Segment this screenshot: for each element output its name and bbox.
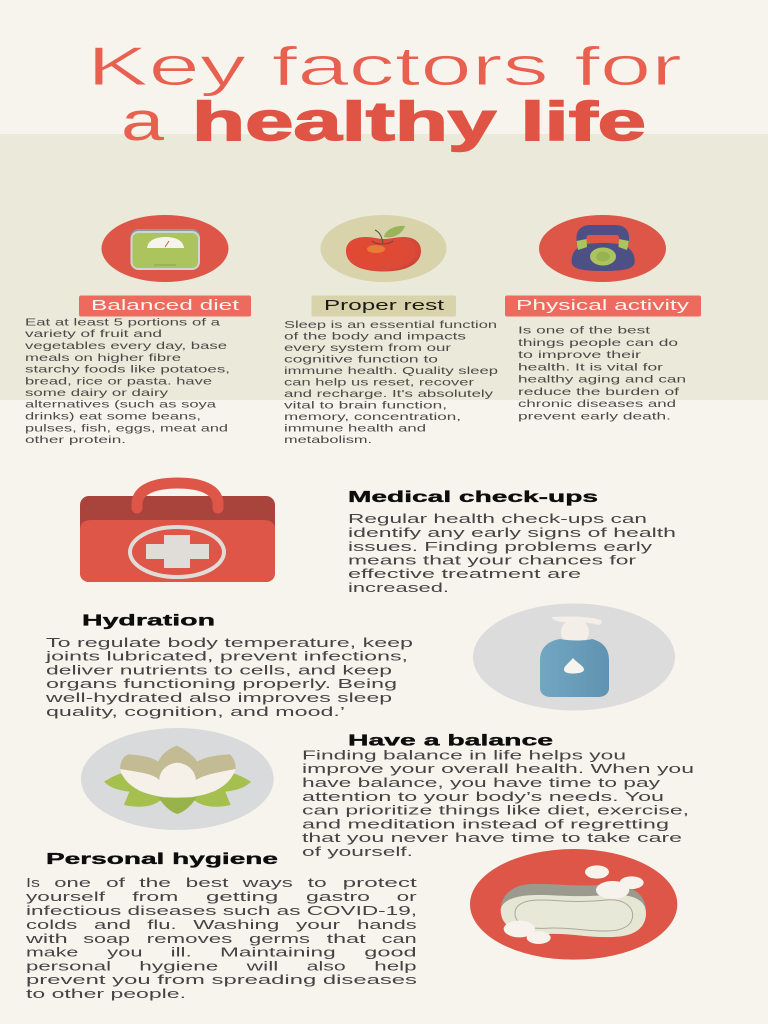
text: personal hygiene: from: [132, 889, 178, 904]
heading: have a balance: Have a balance: [348, 732, 554, 750]
panel: balanced diet: [25, 215, 251, 446]
icon: weighing scale: [102, 215, 228, 282]
text: balanced diet: other protein.: [25, 435, 126, 446]
text: personal hygiene: that: [327, 931, 366, 946]
text: proper rest: memory, concentration,: [284, 412, 461, 423]
text: personal hygiene: hands: [357, 917, 417, 932]
text: personal hygiene: to other people.: [26, 986, 186, 1001]
text: proper rest: immune health. Quality sleep: [284, 366, 498, 377]
text: personal hygiene: yourself: [26, 889, 106, 904]
text: personal hygiene: infectious diseases such as COVID-19,: [26, 903, 417, 918]
heading: personal hygiene: Personal hygiene: [46, 851, 279, 868]
text: have a balance: that you never have time to take care: [302, 830, 682, 845]
text: personal hygiene: prevent you from spreading diseases: [26, 972, 418, 987]
text: personal hygiene: gastro: [306, 889, 370, 904]
section: have a balance: [302, 732, 694, 859]
text: personal hygiene: the: [139, 875, 171, 890]
label: proper rest: [312, 296, 456, 316]
text: hydration: quality, cognition, and mood.’: [46, 704, 345, 719]
text: have a balance: have balance, you have time to pay: [302, 775, 661, 790]
text: have a balance: can prioritize things like diet, exercise,: [302, 802, 689, 818]
text: have a balance: of yourself.: [302, 844, 413, 859]
text: physical activity: prevent early death.: [518, 412, 671, 422]
text: hydration: To regulate body temperature, keep: [46, 635, 413, 650]
text: hydration: [44, 635, 413, 719]
text: personal hygiene: also: [307, 958, 346, 974]
label: balanced diet: Balanced diet: [91, 298, 239, 314]
panel: proper rest: [284, 215, 498, 446]
text: have a balance: improve your overall health. When you: [302, 761, 694, 776]
text: proper rest: Sleep is an essential function: [284, 320, 497, 331]
text: personal hygiene: removes: [147, 931, 233, 946]
icon: kettlebell: [539, 215, 666, 282]
text: balanced diet: drinks) eat some beans,: [25, 412, 201, 422]
text: personal hygiene: personal: [26, 958, 111, 974]
heading: medical check-ups: Medical check-ups: [348, 489, 598, 506]
text: balanced diet: variety of fruit and: [25, 329, 162, 340]
text: proper rest: of the body and impacts: [284, 332, 466, 342]
text: personal hygiene: Is: [26, 875, 41, 890]
text: personal hygiene: or: [397, 889, 418, 904]
text: have a balance: [302, 748, 694, 859]
text: personal hygiene: will: [245, 958, 279, 974]
icon: lotus flower: [81, 728, 274, 830]
text: balanced diet: vegetables every day, base: [25, 341, 227, 352]
text: personal hygiene: Washing: [193, 917, 279, 932]
text: medical check-ups: means that your chances for: [348, 552, 637, 568]
title: Key factors for: [87, 35, 682, 97]
text: medical check-ups: Regular health check-ups can: [348, 511, 647, 526]
text: personal hygiene: of: [106, 875, 126, 890]
text: medical check-ups: effective treatment are: [348, 566, 581, 581]
text: physical activity: health. It is vital for: [518, 362, 664, 374]
text: balanced diet: alternatives (such as soya: [25, 400, 216, 411]
text: have a balance: Finding balance in life helps you: [302, 748, 626, 762]
text: balanced diet: starchy foods like potatoes,: [25, 364, 230, 376]
text: personal hygiene: getting: [206, 889, 278, 904]
text: personal hygiene: with: [24, 931, 68, 946]
title: a: [121, 90, 165, 152]
icon: apple: [320, 215, 446, 282]
text: hydration: well-hydrated also improves sleep: [44, 690, 392, 705]
text: proper rest: every system from our: [284, 343, 452, 354]
label: balanced diet: [79, 296, 251, 316]
text: personal hygiene: ways: [241, 875, 294, 890]
text: personal hygiene: you: [107, 944, 143, 960]
text: balanced diet: Eat at least 5 portions of a: [25, 318, 220, 328]
title: healthy life: [192, 90, 646, 152]
icon: first aid kit: [80, 483, 275, 582]
text: proper rest: cognitive function to: [284, 354, 438, 366]
text: balanced diet: bread, rice or pasta. have: [25, 376, 212, 387]
text: personal hygiene: hygiene: [139, 958, 218, 974]
text: personal hygiene: colds: [26, 917, 78, 932]
text: proper rest: immune health and: [284, 424, 426, 434]
text: personal hygiene: germs: [249, 931, 311, 946]
text: personal hygiene: help: [374, 958, 417, 974]
text: physical activity: Is one of the best: [518, 326, 650, 336]
label: proper rest: Proper rest: [324, 298, 444, 314]
text: have a balance: attention to your body’s needs. You: [302, 789, 664, 804]
title: [87, 35, 682, 152]
text: personal hygiene: protect: [343, 875, 417, 890]
section: hydration: [44, 612, 413, 719]
text: hydration: organs functioning properly. Being: [46, 676, 397, 691]
text: personal hygiene: flu.: [147, 917, 177, 932]
text: hydration: deliver nutrients to cells, and keep: [46, 662, 392, 678]
text: physical activity: healthy aging and can: [518, 374, 686, 386]
heading: hydration: Hydration: [82, 612, 215, 630]
text: medical check-ups: issues. Finding problems early: [348, 539, 653, 554]
text: personal hygiene: your: [296, 917, 341, 932]
label: physical activity: [505, 296, 701, 316]
text: proper rest: metabolism.: [284, 435, 372, 446]
text: physical activity: to improve their: [518, 350, 642, 361]
text: medical check-ups: [348, 511, 676, 595]
text: proper rest: can help us reset, recover: [284, 378, 475, 388]
text: hydration: joints lubricated, prevent infections,: [44, 648, 408, 664]
label: physical activity: Physical activity: [516, 298, 690, 314]
text: balanced diet: meals on higher fibre: [25, 353, 181, 364]
text: physical activity: [518, 326, 686, 422]
text: balanced diet: [25, 318, 230, 446]
section: medical check-ups: [348, 489, 676, 595]
text: personal hygiene: make: [26, 944, 78, 960]
text: proper rest: and recharge. It's absolutely: [284, 389, 494, 400]
text: personal hygiene: Maintaining: [220, 944, 336, 960]
text: have a balance: and meditation instead of regretting: [302, 816, 669, 832]
text: physical activity: things people can do: [518, 338, 678, 349]
text: personal hygiene: one: [54, 875, 91, 890]
text: personal hygiene: to: [308, 875, 327, 890]
icon: soap bar: [470, 849, 677, 960]
text: physical activity: reduce the burden of: [518, 387, 679, 398]
text: proper rest: vital to brain function,: [284, 400, 447, 412]
text: proper rest: [284, 320, 498, 446]
text: personal hygiene: good: [364, 944, 417, 960]
text: balanced diet: some dairy or dairy: [25, 388, 169, 399]
text: balanced diet: pulses, fish, eggs, meat and: [25, 423, 228, 434]
icon: pump bottle: [473, 604, 675, 710]
text: medical check-ups: identify any early signs of health: [348, 525, 676, 540]
text: personal hygiene: and: [94, 917, 131, 932]
text: personal hygiene: best: [186, 875, 229, 890]
section: personal hygiene: [24, 851, 418, 1001]
text: personal hygiene: [24, 875, 418, 1001]
text: personal hygiene: ill.: [171, 944, 192, 960]
panel: physical activity: [505, 215, 701, 422]
text: personal hygiene: can: [382, 931, 417, 946]
text: physical activity: chronic diseases and: [518, 399, 676, 410]
text: personal hygiene: soap: [83, 931, 130, 946]
text: medical check-ups: increased.: [348, 580, 449, 595]
